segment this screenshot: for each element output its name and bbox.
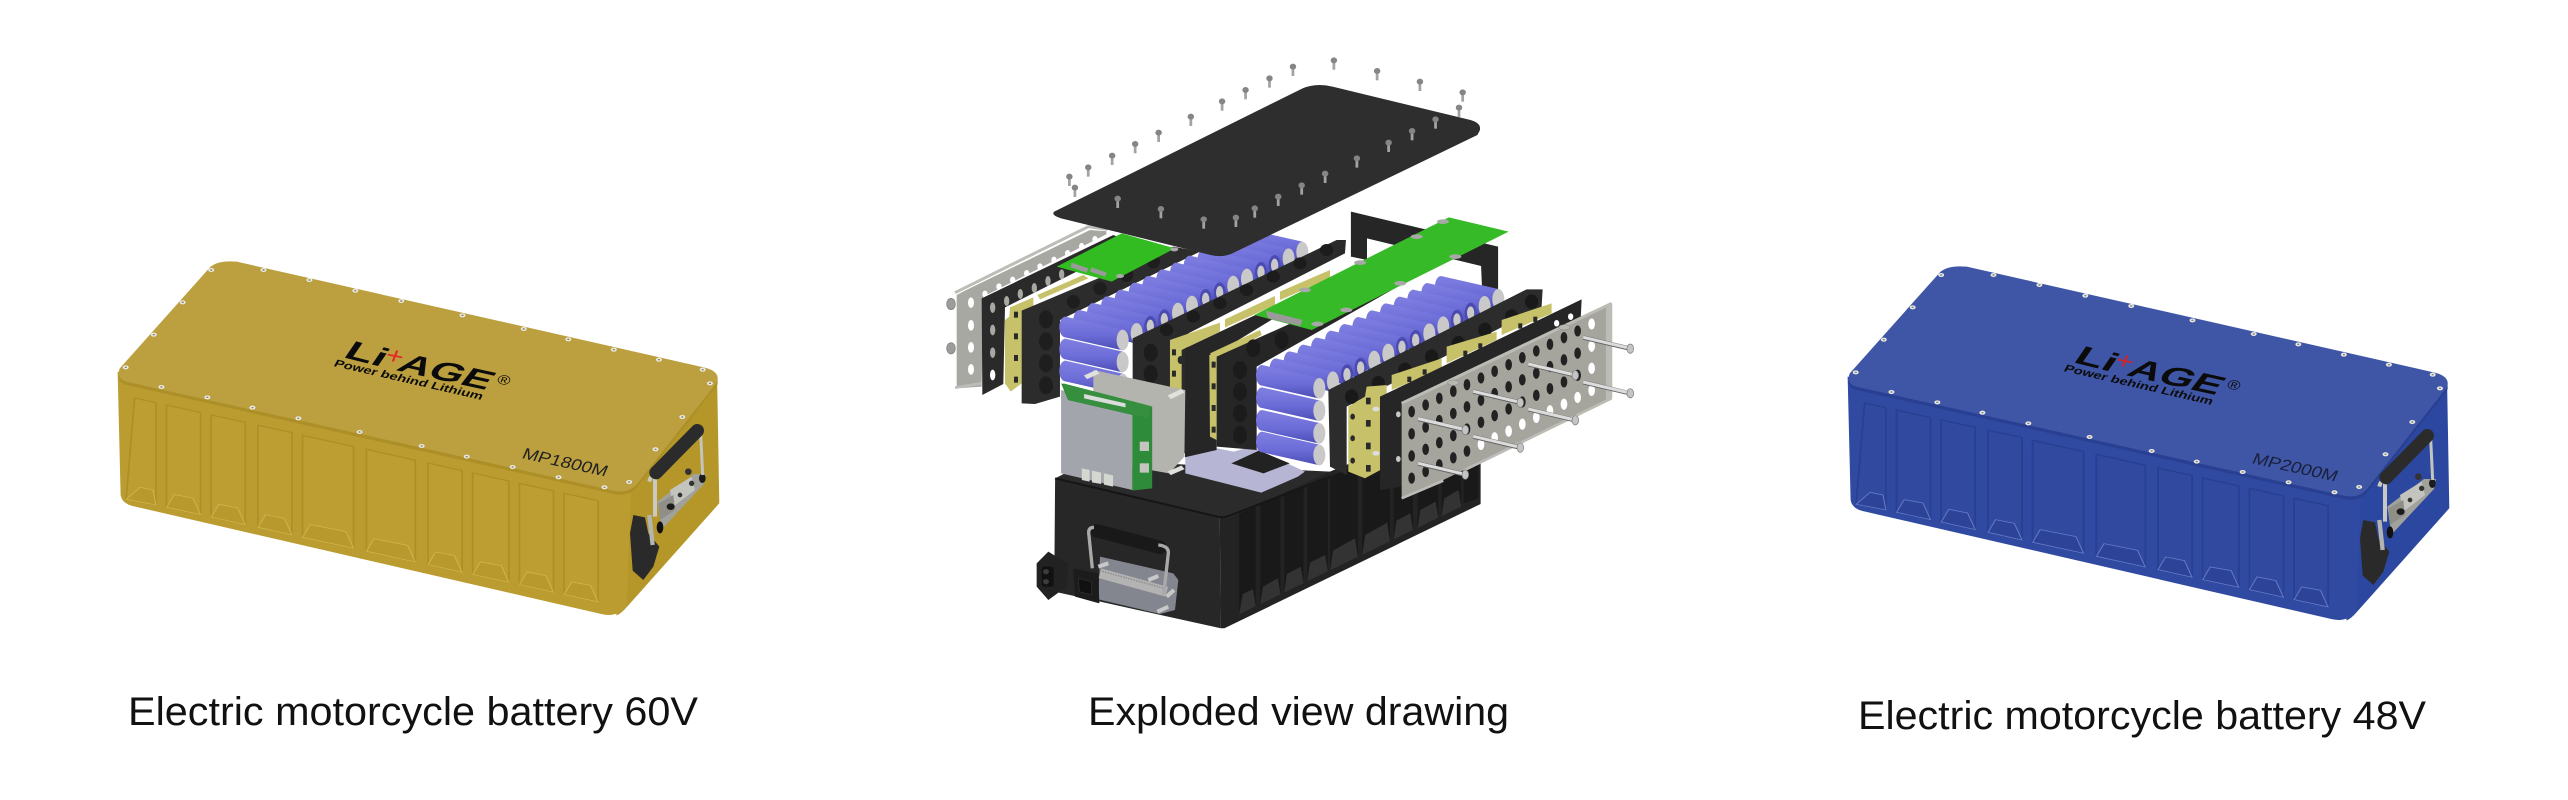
right stack	[1217, 253, 1634, 498]
logo gold	[332, 336, 513, 402]
middle black sheet	[1185, 305, 1277, 457]
model label MP1800M: MP1800M	[520, 445, 611, 480]
top cover plate	[1053, 85, 1480, 256]
long green circuit board	[1254, 217, 1509, 330]
middle yellow strip two	[1209, 330, 1262, 440]
right yellow strip	[1348, 303, 1552, 478]
logo gold: Power behind Lithium	[332, 357, 486, 402]
left perforated bracket	[947, 227, 1112, 388]
small green circuit board	[1057, 233, 1178, 282]
cell block one	[1059, 229, 1308, 394]
battery: 60V gold	[118, 261, 719, 616]
left black plate	[982, 235, 1133, 395]
exploded view drawing	[947, 57, 1634, 628]
battery housing gold	[118, 261, 719, 616]
model label MP2000M: MP2000M	[2250, 450, 2341, 485]
insulating sheet	[1185, 447, 1305, 493]
battery management board	[1061, 370, 1185, 491]
logo blue	[2062, 341, 2243, 407]
battery: 48V blue	[1848, 266, 2449, 621]
logo blue: ®	[2225, 377, 2243, 394]
lower black housing	[1054, 410, 1481, 628]
second cell holder	[1217, 253, 1457, 450]
caption left: Electric motorcycle battery 60V	[128, 690, 698, 734]
right perforated silver plate	[1402, 303, 1612, 498]
logo blue: Li	[2068, 341, 2125, 377]
right black perforated plate	[1380, 299, 1582, 490]
top cover and screws	[1053, 57, 1509, 330]
left cell holder	[1022, 247, 1200, 404]
carry handle and connectors	[1037, 527, 1178, 614]
logo blue: AGE	[2121, 353, 2233, 400]
caption right: Electric motorcycle battery 48V	[1858, 694, 2426, 738]
logo gold: AGE	[391, 348, 503, 395]
cell block two	[1256, 276, 1504, 465]
logo blue: +	[2111, 346, 2139, 375]
battery housing blue	[1848, 266, 2449, 621]
logo gold: Li	[338, 336, 395, 372]
logo gold: ®	[495, 372, 513, 389]
logo gold: +	[381, 341, 409, 370]
middle yellow strip one	[1170, 270, 1330, 407]
long bolts	[1418, 337, 1634, 479]
logo blue: Power behind Lithium	[2062, 362, 2216, 407]
caption center: Exploded view drawing	[1088, 690, 1509, 734]
right cell holder	[1328, 289, 1543, 475]
left stack: perforated bracket, black plate, yellow strip, holder	[947, 227, 1346, 457]
middle holder	[1133, 240, 1346, 453]
left yellow strip	[1005, 275, 1088, 392]
rear black frame	[1351, 212, 1498, 293]
cover screws	[1066, 57, 1466, 229]
